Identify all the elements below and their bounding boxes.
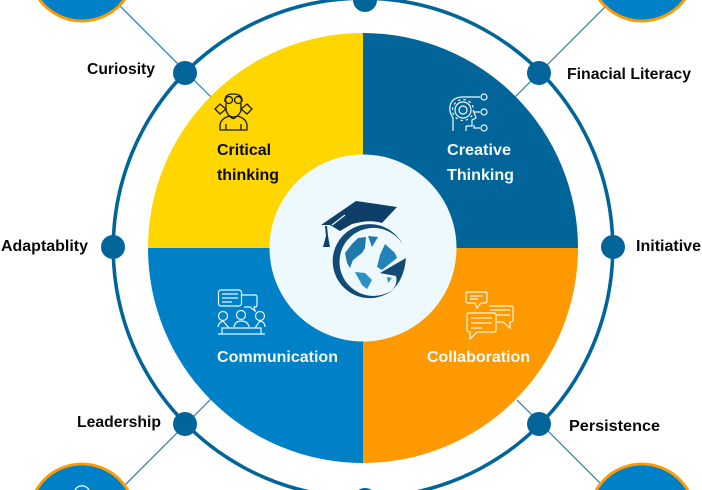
heading: critical thinking	[217, 142, 279, 184]
pie panel: critical thinking	[148, 33, 363, 248]
outer ring	[111, 0, 615, 490]
corner circle: bottom right	[595, 463, 689, 490]
heading: critical thinking: Critical	[217, 142, 271, 159]
corner circle: bottom left	[35, 463, 129, 490]
label: adaptability: Adaptablity	[1, 238, 88, 255]
heading: creative thinking: Creative	[447, 142, 511, 159]
label: persistence: Persistence	[569, 418, 660, 435]
connector lines	[114, 0, 612, 490]
icon: communication	[218, 290, 265, 334]
label: leadership: Leadership	[77, 414, 161, 431]
center disc	[270, 154, 456, 342]
icon: creative thinking	[450, 94, 487, 131]
heading: communication: Communication	[217, 349, 338, 366]
pie panel: collaboration	[363, 248, 578, 463]
heading: collaboration: Collaboration	[427, 349, 530, 366]
pie panel: creative thinking	[363, 33, 578, 248]
label: initiative: Initiative	[636, 238, 701, 255]
icon: collaboration	[466, 292, 513, 339]
node markers	[101, 0, 625, 490]
heading: creative thinking	[447, 142, 514, 184]
heading: critical thinking: thinking	[217, 167, 279, 184]
icon: critical thinking	[215, 94, 252, 130]
heading: creative thinking: Thinking	[447, 167, 514, 184]
corner circle: top right	[598, 0, 686, 22]
logo: graduation cap and globe	[321, 201, 406, 298]
corner circle: top left	[38, 0, 126, 22]
label: curiosity: Curiosity	[87, 61, 155, 78]
label: financial literacy: Finacial Literacy	[567, 66, 691, 83]
pie panel: communication	[148, 248, 363, 463]
